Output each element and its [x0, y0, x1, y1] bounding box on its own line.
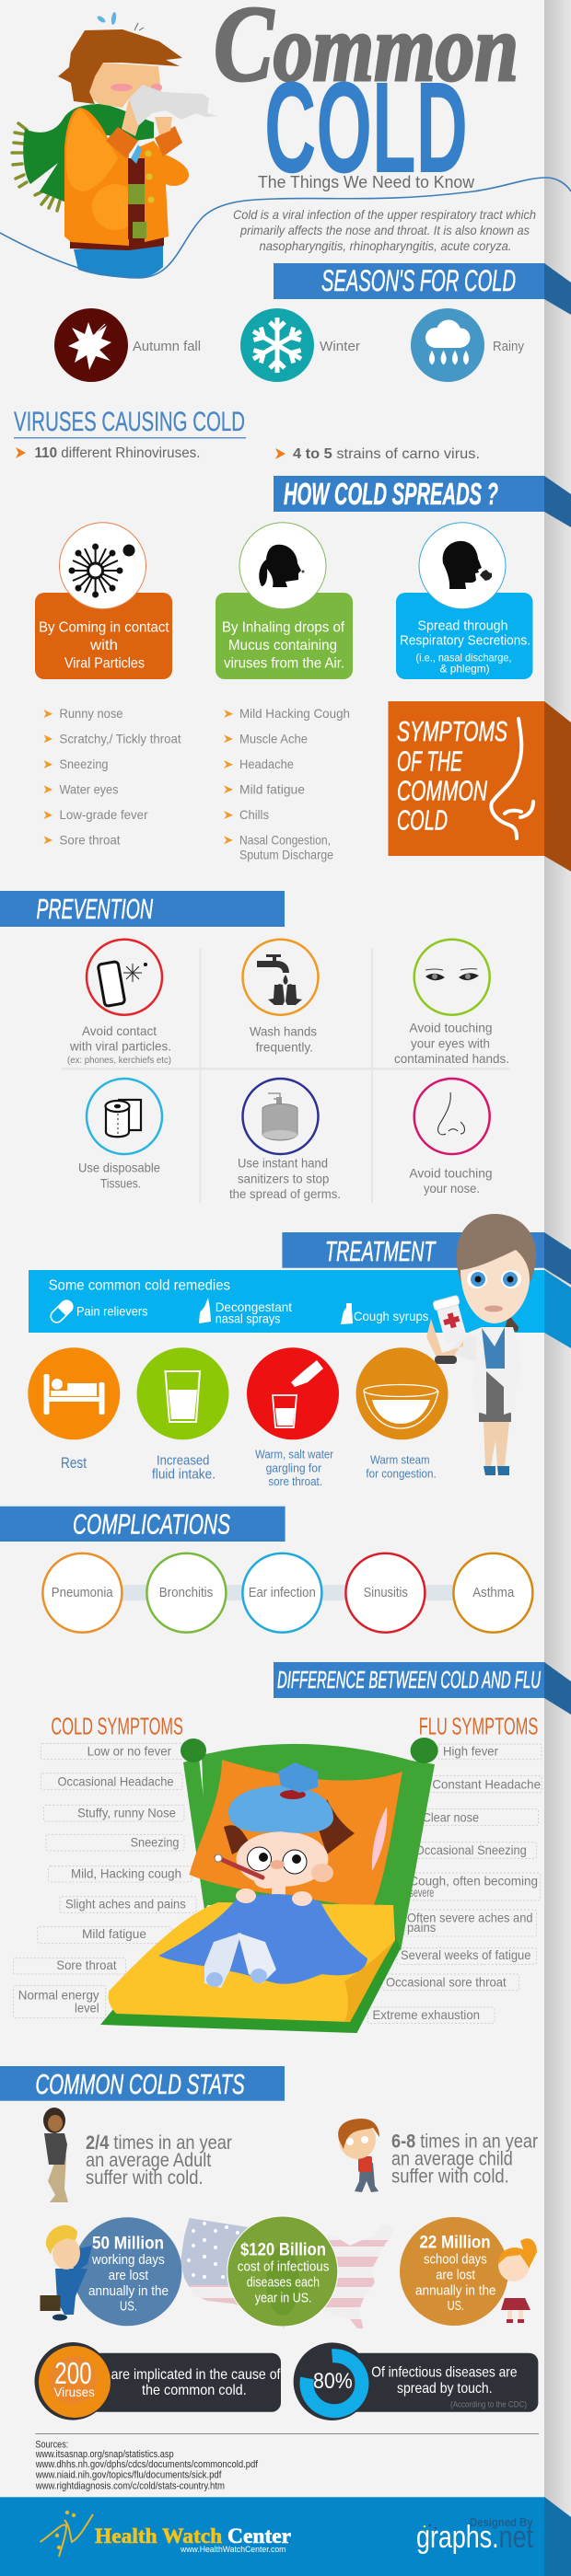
prevention: tissues: Tissues.	[100, 1175, 141, 1190]
eyes	[467, 1270, 521, 1288]
season: winter: Winter	[320, 339, 360, 354]
heading ribbon: Common cold stats	[0, 2066, 285, 2101]
complications circles	[42, 1554, 532, 1633]
symptom list column 1: Runny nose	[59, 706, 123, 721]
symptom list column 2	[224, 706, 350, 861]
heading: viruses causing cold: VIRUSES CAUSING COLD	[14, 407, 245, 437]
stat: working days lost: US.	[120, 2299, 137, 2315]
virus fact 1: 110 different Rhinoviruses.	[35, 445, 201, 461]
hem	[70, 237, 164, 250]
stat: adult: 2/4 times in an year	[86, 2132, 232, 2154]
panel: inhaling drops of mucus: viruses from the Air.	[224, 656, 344, 672]
cold symptom list: level	[75, 2001, 99, 2016]
prevention: avoid contact: (ex: phones, kerchiefs etc)	[67, 1055, 171, 1066]
symptom list column 1: Water eyes	[59, 781, 118, 796]
icon: adult figure	[43, 2108, 68, 2202]
icon: eyes	[425, 969, 479, 980]
socks	[204, 1933, 241, 1988]
symptom list column 1: Sore throat	[59, 832, 121, 847]
mouth	[484, 1305, 503, 1312]
stat bar: 200 viruses: are implicated in the cause of	[111, 2367, 281, 2383]
divider and sources: Sources:	[35, 2439, 68, 2450]
cold symptom list: Sore throat	[56, 1958, 117, 1972]
symptom list column 2: Mild fatigue	[239, 781, 305, 796]
ribbon folds on the right edge	[544, 263, 571, 2576]
stat bar: 80 percent: spread by touch.	[397, 2381, 493, 2397]
season: autumn: Autumn fall	[133, 339, 201, 354]
right post	[386, 1761, 435, 1951]
flu symptom list: Often severe aches and	[407, 1910, 532, 1924]
ponytail	[505, 1314, 519, 1332]
season: autumn	[54, 308, 201, 382]
donut chart	[307, 2356, 362, 2411]
stat: school days lost	[400, 2217, 508, 2326]
divider and sources: www.dhhs.nh.gov/dphs/cdcs/documents/commoncold.pdf	[35, 2459, 259, 2470]
flu symptom list: Occasional sore throat	[386, 1974, 507, 1989]
treatment: salt water gargling: sore throat.	[268, 1474, 322, 1488]
blue wave line	[0, 178, 571, 278]
symptom list column 2: Headache	[239, 757, 294, 771]
scarf	[23, 104, 154, 202]
flu symptom list: Extreme exhaustion	[372, 2007, 480, 2022]
map: US flag silhouette	[181, 2218, 389, 2328]
complication: pneumonia	[42, 1554, 122, 1633]
flu symptom list	[367, 1744, 542, 2023]
coat	[64, 108, 129, 246]
blanket	[158, 1894, 367, 1984]
face	[460, 1250, 530, 1323]
stat bar: 80 percent: (According to the CDC)	[450, 2400, 527, 2409]
thermometer	[216, 1857, 262, 1877]
credit: designed by graphs.net: graphs.net	[416, 2520, 533, 2555]
coat sleeve highlight	[66, 109, 118, 191]
treatment: rest	[28, 1347, 120, 1472]
buttons	[146, 151, 155, 202]
icon: nose	[438, 1092, 464, 1135]
prevention: eyes: Avoid touching	[409, 1020, 493, 1034]
complication: sinusitis: Sinusitis	[364, 1585, 408, 1600]
treatment: salt water gargling: Warm, salt water	[255, 1447, 334, 1461]
stat: working days lost: 50 Million	[92, 2234, 164, 2253]
intro paragraph: Cold is a viral infection of the upper respiratory tract which	[233, 207, 536, 222]
prevention: wash hands: frequently.	[256, 1040, 313, 1055]
panel: respiratory secretions: (i.e., nasal discharge,	[416, 651, 512, 664]
prevention: nose: your nose.	[424, 1181, 480, 1196]
stat: cost of infectious diseases	[227, 2216, 338, 2327]
prevention: wash hands	[243, 940, 319, 1055]
sweat drops	[96, 12, 117, 25]
complication: sinusitis	[345, 1554, 425, 1633]
tie	[131, 144, 142, 164]
intro paragraph: primarily affects the nose and throat. It is also known as	[239, 223, 530, 237]
icon: capsule	[49, 1299, 75, 1324]
cold symptom list: Mild, Hacking cough	[71, 1866, 181, 1881]
stat bar: 200 viruses: the common cold.	[142, 2383, 247, 2398]
panel: inhaling drops of mucus	[216, 523, 353, 679]
mattress	[109, 1902, 395, 2022]
jeans	[74, 246, 163, 278]
bed base	[100, 1905, 401, 2033]
flu symptom list: Clear nose	[423, 1809, 479, 1824]
panel: contact with viral particles: By Coming in contact	[39, 620, 169, 636]
hair	[58, 29, 182, 104]
prevention: nose	[409, 1079, 493, 1196]
panel: common cold remedies: nasal sprays	[216, 1311, 280, 1325]
illustration: doctor holding pill bottle	[426, 1214, 536, 1475]
panel: common cold remedies: Pain relievers	[76, 1303, 147, 1318]
stat: child: an average child	[391, 2148, 513, 2169]
treatment: fluid intake	[136, 1347, 228, 1483]
symptom list column 2: Mild Hacking Cough	[239, 706, 350, 721]
prevention: avoid contact: with viral particles.	[69, 1039, 171, 1054]
treatment: salt water gargling	[247, 1347, 339, 1488]
stat: child	[338, 2119, 538, 2192]
panel: inhaling drops of mucus: By Inhaling drops of	[222, 620, 345, 636]
shirt	[482, 1327, 505, 1369]
intro paragraph: nasopharyngitis, rhinopharyngitis, acute coryza.	[260, 238, 512, 253]
icon: virus	[70, 545, 134, 596]
pill bottle	[433, 1295, 469, 1345]
prevention: eyes	[394, 940, 509, 1066]
scarf fringe	[12, 123, 60, 211]
icon: phone and virus	[98, 961, 147, 1007]
virus fact 2: 4 to 5 strains of carno virus.	[293, 446, 480, 462]
panel: symptoms of the common cold: SYMPTOMS	[397, 715, 507, 747]
cuffs	[106, 127, 138, 158]
symptom list column 2: Sputum Discharge	[239, 847, 333, 861]
symptom list column 1: Scratchy,/ Tickly throat	[59, 731, 181, 745]
icon: child figure	[338, 2119, 379, 2192]
treatment: steam	[355, 1347, 448, 1480]
symptom list column 1	[44, 706, 181, 847]
treatment: rest: Rest	[61, 1454, 87, 1472]
flu symptom list: pains	[407, 1920, 436, 1935]
symptom list column 1: Sneezing	[59, 757, 109, 771]
icon: faucet and hands	[257, 954, 302, 1005]
panel: symptoms of the common cold	[389, 701, 544, 856]
season: rainy	[411, 308, 524, 382]
symptom list column 1: Low-grade fever	[59, 807, 148, 822]
stat bar: 200 viruses	[35, 2342, 281, 2420]
cold symptom list: Low or no fever	[87, 1744, 171, 1759]
footer band: www.HealthWatchCenter.com	[180, 2545, 286, 2554]
treatment: fluid intake: Increased	[157, 1453, 209, 1469]
icon: nasal spray	[199, 1298, 211, 1323]
cold symptom list: Occasional Headache	[57, 1774, 174, 1789]
flu symptom list: High fever	[443, 1744, 498, 1759]
hands	[236, 1889, 256, 1903]
stat bar: 200 viruses: 200	[54, 2356, 92, 2390]
prevention: avoid contact	[67, 940, 171, 1066]
heading ribbon: Complications: COMPLICATIONS	[73, 1508, 230, 1541]
heading ribbon: Prevention	[0, 891, 285, 927]
heading ribbon: Treatment: TREATMENT	[325, 1235, 437, 1267]
divider and sources: www.rightdiagnosis.com/c/cold/stats-country.htm	[35, 2481, 225, 2492]
stat: working days lost: are lost	[109, 2268, 149, 2283]
legs	[484, 1422, 509, 1466]
stat bar: 80 percent: 80%	[313, 2369, 353, 2394]
icon: syrup bottle	[341, 1303, 353, 1324]
panel: common cold remedies: Some common cold remedies	[49, 1278, 230, 1294]
tissue	[129, 85, 218, 126]
complication: bronchitis	[146, 1554, 226, 1633]
cold symptom list: Slight aches and pains	[65, 1896, 186, 1911]
icon: Health Watch Center logo mark	[41, 2512, 93, 2557]
stat: working days lost	[73, 2217, 181, 2326]
pillow	[190, 1760, 402, 1912]
panel: symptoms of the common cold: COLD	[397, 804, 448, 837]
flu symptom list: Cough, often becoming	[409, 1874, 538, 1889]
complication: pneumonia: Pneumonia	[52, 1585, 113, 1600]
icon: tissue roll	[105, 1100, 141, 1138]
panel: common cold remedies	[29, 1270, 544, 1333]
ice bag	[228, 1785, 333, 1833]
stat: school days lost: 22 Million	[420, 2234, 491, 2253]
prevention: sanitizer: sanitizers to stop	[238, 1171, 330, 1185]
treatment: steam: for congestion.	[366, 1466, 437, 1480]
prevention: wash hands: Wash hands	[250, 1024, 317, 1039]
illustration: schoolgirl	[498, 2238, 537, 2323]
panel: common cold remedies: Decongestant	[216, 1300, 292, 1314]
stat: adult: an average Adult	[86, 2150, 211, 2171]
icon: bottle pouring and glass	[273, 1360, 323, 1427]
divider and sources	[35, 2433, 539, 2492]
hands	[122, 98, 143, 136]
treatment: salt water gargling: gargling for	[266, 1461, 322, 1474]
shirt stripes	[128, 158, 145, 239]
icon: bed	[44, 1374, 105, 1415]
illustration: businessman	[41, 2225, 92, 2321]
heading ribbon: Complications	[0, 1507, 286, 1542]
intro paragraph	[233, 207, 536, 253]
complication connector band	[82, 1585, 493, 1600]
eyes	[247, 1847, 307, 1874]
sleeve and arm	[449, 1334, 477, 1362]
stat: cost of infectious diseases: diseases each	[247, 2274, 320, 2290]
symptom list column 2: Nasal Congestion,	[239, 832, 331, 847]
illustration: man sneezing with scarf	[12, 12, 218, 278]
stat bar: 80 percent	[294, 2342, 538, 2420]
panel: respiratory secretions	[396, 523, 532, 679]
icon: bowl	[364, 1384, 438, 1428]
prevention: eyes: contaminated hands.	[394, 1051, 509, 1066]
panel: symptoms of the common cold: OF THE	[397, 745, 462, 778]
logo text: Health Watch Center	[95, 2524, 291, 2547]
heading ribbon: Prevention: PREVENTION	[37, 893, 153, 925]
panel: inhaling drops of mucus: Mucus containing	[228, 638, 337, 653]
hair back	[457, 1214, 536, 1281]
cold symptom list: Normal energy	[18, 1988, 99, 2003]
complication: ear infection	[242, 1554, 321, 1633]
prevention: eyes: your eyes with	[411, 1035, 490, 1050]
cold symptom list: Stuffy, runny Nose	[77, 1805, 176, 1819]
heading ribbon: Common cold stats: COMMON COLD STATS	[35, 2068, 245, 2100]
heading ribbon: Seasons	[274, 263, 544, 299]
flu symptom list: Occasional Sneezing	[415, 1842, 527, 1857]
stat: cost of infectious diseases: year in US.	[255, 2291, 311, 2306]
prevention: tissues	[78, 1079, 162, 1190]
stat: working days lost: working days	[91, 2252, 165, 2268]
flu symptom list: severe	[409, 1885, 434, 1900]
complication: ear infection: Ear infection	[249, 1585, 316, 1600]
complication: asthma	[453, 1554, 532, 1633]
headboard	[202, 1744, 412, 1910]
shoes	[484, 1466, 509, 1475]
panel: respiratory secretions: Respiratory Secretions.	[400, 632, 530, 648]
prevention grid lines	[62, 948, 509, 1203]
icon: woman profile	[259, 545, 301, 587]
flu symptom list: Constant Headache	[432, 1776, 541, 1791]
icon: glass of water	[166, 1371, 200, 1422]
treatment: steam: Warm steam	[370, 1453, 430, 1467]
stat: school days lost: school days	[424, 2251, 487, 2267]
skirt	[479, 1369, 511, 1422]
stat: school days lost: are lost	[436, 2268, 476, 2283]
prevention: sanitizer: the spread of germs.	[229, 1186, 341, 1201]
flu symptom list: Several weeks of fatigue	[401, 1947, 531, 1962]
season: winter	[240, 308, 360, 382]
divider and sources: www.niaid.nih.gov/topics/flu/documents/sick.pdf	[35, 2470, 222, 2481]
panel: contact with viral particles	[35, 523, 172, 679]
stat: school days lost: annually in the	[415, 2282, 496, 2298]
icon: man coughing	[443, 541, 482, 589]
subtitle: The Things We Need to Know	[258, 173, 475, 191]
complication: bronchitis: Bronchitis	[159, 1585, 213, 1600]
stat: school days lost: US.	[448, 2298, 464, 2314]
symptom list column 2: Muscle Ache	[239, 731, 308, 745]
cold symptom list: Mild fatigue	[82, 1926, 146, 1941]
icon: nose outline	[491, 719, 533, 838]
panel: contact with viral particles: Viral Particles	[64, 656, 145, 672]
footer band	[0, 2497, 544, 2576]
treatment: fluid intake: fluid intake.	[152, 1467, 216, 1483]
left post	[183, 1758, 215, 1910]
stat: cost of infectious diseases: $120 Billion	[240, 2241, 326, 2260]
panel: respiratory secretions: & phlegm)	[440, 663, 490, 676]
stat bar: 80 percent: Of infectious diseases are	[371, 2365, 518, 2381]
panel: contact with viral particles: with	[89, 638, 118, 653]
prevention: tissues: Use disposable	[78, 1161, 160, 1175]
prevention: sanitizer: Use instant hand	[238, 1155, 328, 1170]
coat	[463, 1327, 522, 1415]
stat: child: suffer with cold.	[391, 2166, 509, 2188]
icon: sanitizer bottle	[262, 1093, 297, 1140]
season: rainy: Rainy	[493, 339, 524, 354]
stat: adult	[43, 2108, 232, 2202]
complication: asthma: Asthma	[472, 1585, 515, 1600]
symptom list column 2: Chills	[239, 807, 269, 822]
face	[87, 63, 161, 108]
stat bar: 200 viruses: Viruses	[53, 2385, 95, 2399]
panel: respiratory secretions: Spread through	[418, 618, 508, 633]
prevention: nose: Avoid touching	[409, 1165, 493, 1180]
prevention: sanitizer	[229, 1079, 341, 1201]
hair	[224, 1799, 355, 1854]
cold symptom list: Sneezing	[131, 1835, 179, 1850]
illustration: sick boy in bed	[100, 1738, 438, 2033]
stat: working days lost: annually in the	[88, 2283, 169, 2299]
panel: common cold remedies: Cough syrups	[354, 1309, 428, 1323]
heading: cold symptoms: COLD SYMPTOMS	[51, 1712, 183, 1739]
heading ribbon: Treatment	[282, 1232, 544, 1268]
stat: child: 6-8 times in an year	[391, 2131, 538, 2152]
stat: adult: suffer with cold.	[86, 2167, 204, 2189]
credit: designed by graphs.net: Designed By	[470, 2515, 533, 2529]
cold symptom list	[14, 1743, 196, 2018]
prevention: avoid contact: Avoid contact	[82, 1023, 157, 1038]
stat: cost of infectious diseases: cost of infectious	[238, 2258, 329, 2274]
divider and sources: www.itsasnap.org/snap/statistics.asp	[35, 2449, 174, 2460]
face	[236, 1831, 328, 1887]
panel: symptoms of the common cold: COMMON	[397, 774, 487, 806]
